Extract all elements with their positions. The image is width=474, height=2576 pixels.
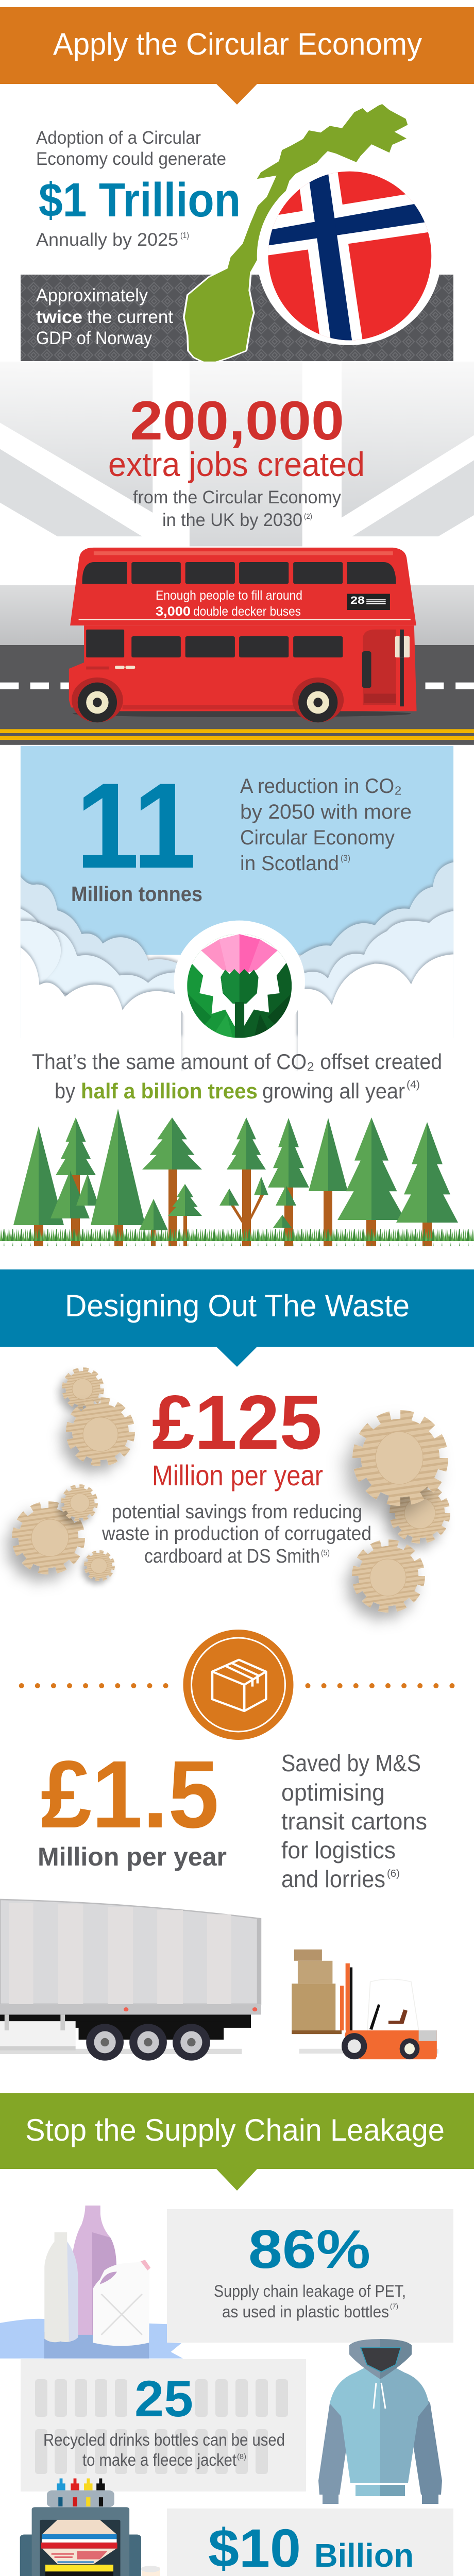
panel: twice GDP of Norway (21, 275, 453, 361)
panel: twice GDP of Norway: the current (87, 307, 173, 327)
panel: apply the circular economy header (0, 7, 474, 105)
bus text: 28 (350, 595, 365, 606)
icon: Norway map and flag (184, 103, 442, 365)
text block: CO2 reduction (240, 775, 412, 875)
text block: 125 million per year (101, 1379, 371, 1567)
text block: M&S transit cartons (281, 1750, 427, 1892)
text block: one trillion: Economy could generate (36, 149, 226, 169)
icon: fleece jacket hoodie (318, 2339, 442, 2504)
text block: CO2 reduction: Circular Economy (240, 826, 395, 849)
text block: half a billion trees (32, 1049, 442, 1103)
icon: forest of trees (0, 1109, 474, 1246)
text block: 125 million per year: (5) (321, 1549, 330, 1557)
bus text: 3,000 (156, 604, 191, 619)
text block: M&S transit cartons: transit cartons (281, 1808, 427, 1835)
panel: stop the supply chain leakage header (0, 2093, 474, 2191)
heading: designing out the waste: Designing Out The Waste (65, 1289, 410, 1323)
panel: 25 recycled bottles (21, 2359, 306, 2492)
panel: 86 percent: Supply chain leakage of PET, (214, 2282, 406, 2300)
stat: 1.5 million per year: £1.5 (41, 1741, 219, 1848)
heading: apply the circular economy: Apply the Circular Economy (53, 27, 422, 61)
clouds (18, 861, 456, 1073)
panel: 86 percent: (7) (390, 2302, 398, 2310)
text block: 200,000 jobs: extra jobs created (108, 445, 365, 483)
text block: half a billion trees: growing all year (262, 1079, 405, 1103)
panel: 25 recycled bottles: Recycled drinks bottles can be used (43, 2430, 285, 2449)
text block: 200,000 jobs (108, 389, 365, 530)
panel: 25 recycled bottles: 25 (134, 2370, 193, 2427)
panel: twice GDP of Norway: twice (36, 307, 82, 327)
stat: 11 million tonnes: Million tonnes (71, 882, 202, 906)
icon: cardboard box (212, 1660, 266, 1711)
text block: half a billion trees: (4) (407, 1079, 420, 1091)
heading: stop the supply chain leakage: Stop the Supply Chain Leakage (25, 2113, 445, 2147)
road (0, 645, 474, 745)
panel: twice GDP of Norway: GDP of Norway (36, 328, 152, 348)
stat: 11 million tonnes: 11 (76, 758, 196, 894)
icon: red double decker bus (69, 548, 417, 722)
icon: Norwegian flag (260, 167, 435, 342)
text block: M&S transit cartons: Saved by M&S (281, 1750, 421, 1776)
grass (0, 1229, 474, 1246)
icon: Scottish thistle (174, 921, 305, 1043)
panel: 86 percent: 86% (248, 2219, 370, 2280)
text block: M&S transit cartons: and lorries (281, 1866, 385, 1892)
text block: 200,000 jobs: (2) (304, 512, 312, 521)
text block: CO2 reduction: A reduction in CO₂ (240, 775, 402, 798)
bus text (156, 588, 365, 619)
panel: 10 billion: Billion (314, 2537, 414, 2574)
text block: one trillion: (1) (180, 231, 189, 240)
text block: 125 million per year: waste in production of corrugated (101, 1523, 371, 1545)
text block: one trillion: Annually by 2025 (36, 230, 178, 250)
stat: 1.5 million per year: Million per year (38, 1842, 227, 1871)
text block: 125 million per year: £125 (152, 1379, 322, 1465)
dotted divider with box icon (22, 1630, 452, 1740)
panel: 86 percent: as used in plastic bottles (222, 2302, 389, 2321)
text block: 200,000 jobs: 200,000 (130, 389, 344, 451)
panel: 25 recycled bottles: (8) (237, 2452, 246, 2461)
text block: one trillion: Adoption of a Circular (36, 128, 201, 148)
wheels (72, 677, 123, 722)
panel: UK jobs union jack background (0, 362, 474, 745)
icon: rows of grey bottles (35, 2379, 288, 2474)
panel: 10 billion (167, 2509, 453, 2576)
text block: 125 million per year: cardboard at DS Smith (144, 1546, 320, 1567)
text block: M&S transit cartons: optimising (281, 1779, 385, 1806)
text block: 200,000 jobs: from the Circular Economy (133, 487, 341, 507)
stat: one trillion dollars: $1 Trillion (39, 173, 241, 227)
icon: forklift with boxes (292, 1950, 438, 2059)
text block: half a billion trees: by (55, 1079, 75, 1103)
icon: cardboard gears (15, 1369, 447, 1609)
text block: CO2 reduction: (3) (341, 853, 350, 863)
horizon (0, 585, 474, 645)
icon: lorry trailer (0, 1900, 261, 2061)
panel: Scotland CO2 sky (18, 746, 456, 1073)
text block: half a billion trees: half a billion trees (81, 1079, 258, 1103)
text block: CO2 reduction: in Scotland (240, 852, 339, 875)
text block: 200,000 jobs: in the UK by 2030 (162, 510, 302, 530)
text block: 125 million per year: Million per year (152, 1459, 323, 1492)
text block: M&S transit cartons: for logistics (281, 1837, 396, 1863)
text block: 125 million per year: potential savings from reducing (112, 1501, 362, 1523)
bus text: Enough people to fill around (156, 588, 302, 603)
panel: 86 percent (167, 2209, 453, 2343)
panel: 25 recycled bottles: to make a fleece jacket (82, 2450, 236, 2469)
text block: half a billion trees: That’s the same amount of CO₂ offset created (32, 1049, 442, 1074)
icon: printing press (20, 2479, 178, 2576)
map: Norway (184, 103, 409, 365)
panel: twice GDP of Norway: Approximately (36, 285, 148, 306)
text block: M&S transit cartons: (6) (387, 1868, 400, 1879)
text block: one trillion (36, 128, 241, 250)
bus text: double decker buses (193, 604, 301, 619)
icon: plastic bottles in puddle (0, 2206, 183, 2359)
text block: CO2 reduction: by 2050 with more (240, 801, 412, 823)
bus route sign (347, 594, 390, 610)
panel: designing out the waste header (0, 1269, 474, 1367)
